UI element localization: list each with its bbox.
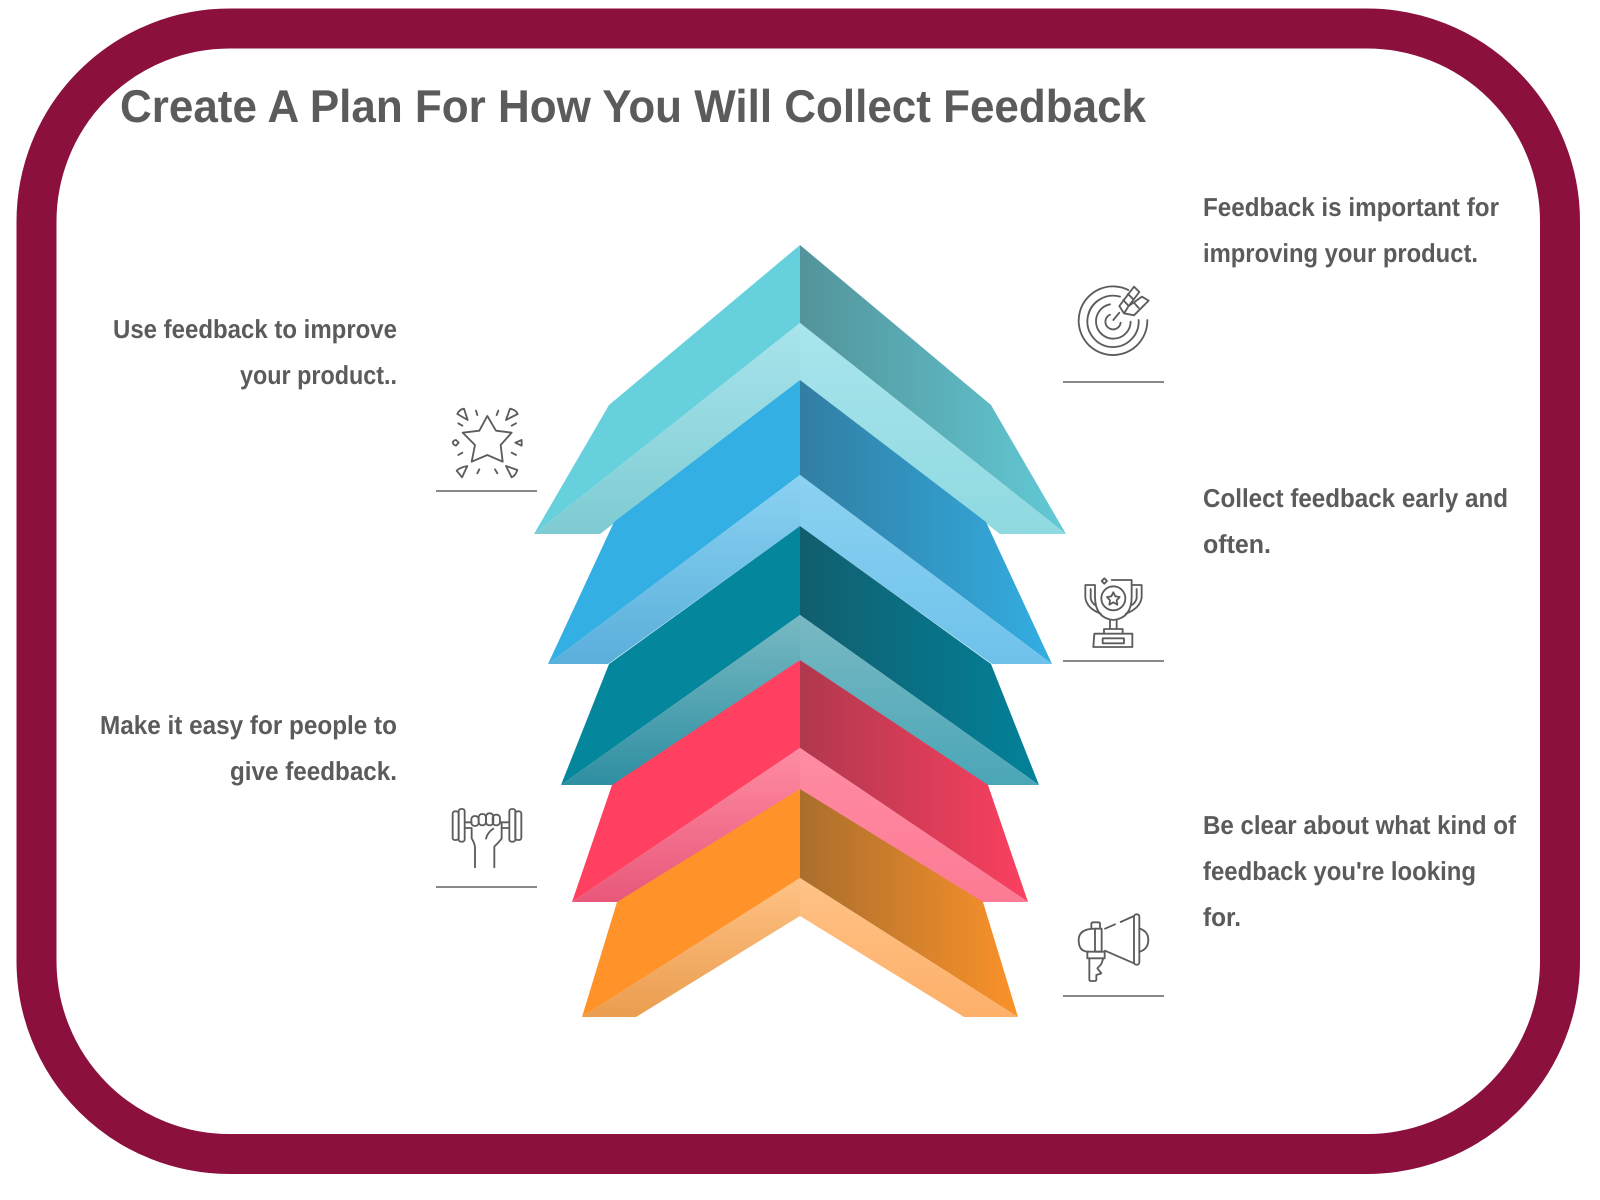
title: Create A Plan For How You Will Collect Feedback — [120, 80, 1146, 132]
text: feedback is important: Feedback is important for — [1203, 192, 1499, 222]
text: use feedback: your product.. — [240, 360, 397, 390]
text: use feedback: Use feedback to improve — [113, 314, 397, 344]
arrow layer: red — [572, 660, 1028, 902]
text: be clear: for. — [1203, 902, 1241, 932]
text: use feedback — [113, 314, 397, 390]
arrow layer: light teal — [534, 245, 1066, 534]
text: feedback is important: improving your product. — [1203, 238, 1478, 268]
text: make it easy: give feedback. — [230, 756, 397, 786]
arrow stack — [534, 245, 1066, 1017]
arrow layer: blue — [548, 380, 1052, 664]
arrow layer: dark teal — [561, 526, 1039, 785]
icon: fist with dumbbell — [453, 809, 521, 867]
icon: megaphone — [1079, 914, 1148, 981]
text: collect early — [1203, 483, 1508, 559]
text: collect early: Collect feedback early and — [1203, 483, 1508, 513]
arrow layer: orange — [582, 789, 1018, 1017]
text: collect early: often. — [1203, 529, 1271, 559]
text: be clear: Be clear about what kind of — [1203, 810, 1516, 840]
rule: megaphone — [1063, 995, 1164, 997]
text: be clear — [1203, 810, 1516, 932]
text: make it easy: Make it easy for people to — [100, 710, 397, 740]
rule: target — [1063, 381, 1164, 383]
icon: star with sparkles — [453, 409, 522, 477]
text: feedback is important — [1203, 192, 1499, 268]
rule: dumbbell — [436, 886, 537, 888]
icon: target with arrow — [1079, 286, 1149, 355]
text: be clear: feedback you're looking — [1203, 856, 1476, 886]
icon: trophy — [1085, 578, 1142, 647]
rule: trophy — [1063, 660, 1164, 662]
text: make it easy — [100, 710, 397, 786]
rule: star — [436, 490, 537, 492]
